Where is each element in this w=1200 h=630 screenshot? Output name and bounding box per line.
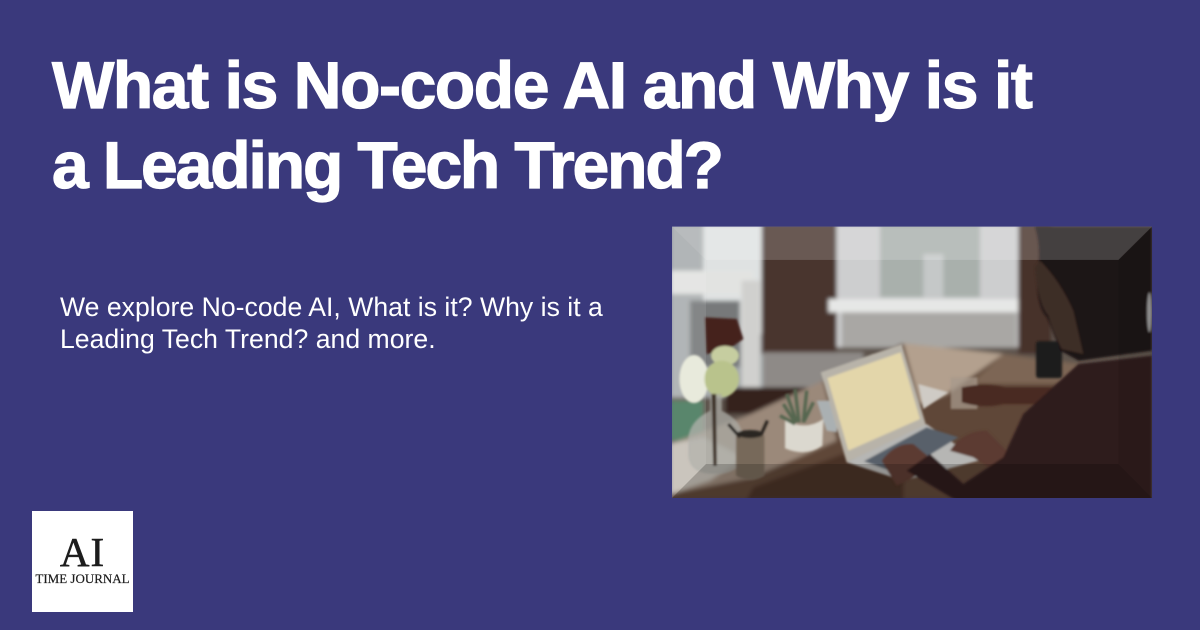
shirt [907, 356, 1152, 507]
title: a Leading Tech Trend? [52, 128, 722, 202]
head [1035, 227, 1152, 361]
bevel frame overlay [672, 227, 1152, 498]
description text: Leading Tech Trend? and more. [60, 324, 436, 354]
far arm [962, 385, 1080, 406]
title [51, 48, 1033, 203]
logo name: TIME JOURNAL [35, 571, 130, 586]
laptop behind [918, 384, 948, 409]
title: What is No-code AI and Why is it [52, 48, 1031, 122]
flowers and vase [679, 227, 1152, 507]
logo: AI Time Journal [32, 511, 133, 612]
photo: person working at a laptop [672, 226, 1152, 498]
logo letters AI: AI [60, 529, 105, 575]
plant [785, 419, 823, 452]
face [1035, 261, 1083, 354]
description text: We explore No-code AI, What is it? Why is it a [60, 292, 603, 322]
laptop [821, 344, 927, 462]
pen holder [736, 432, 764, 480]
description text [60, 292, 603, 354]
hands [882, 444, 933, 486]
glass and mug [951, 377, 977, 409]
